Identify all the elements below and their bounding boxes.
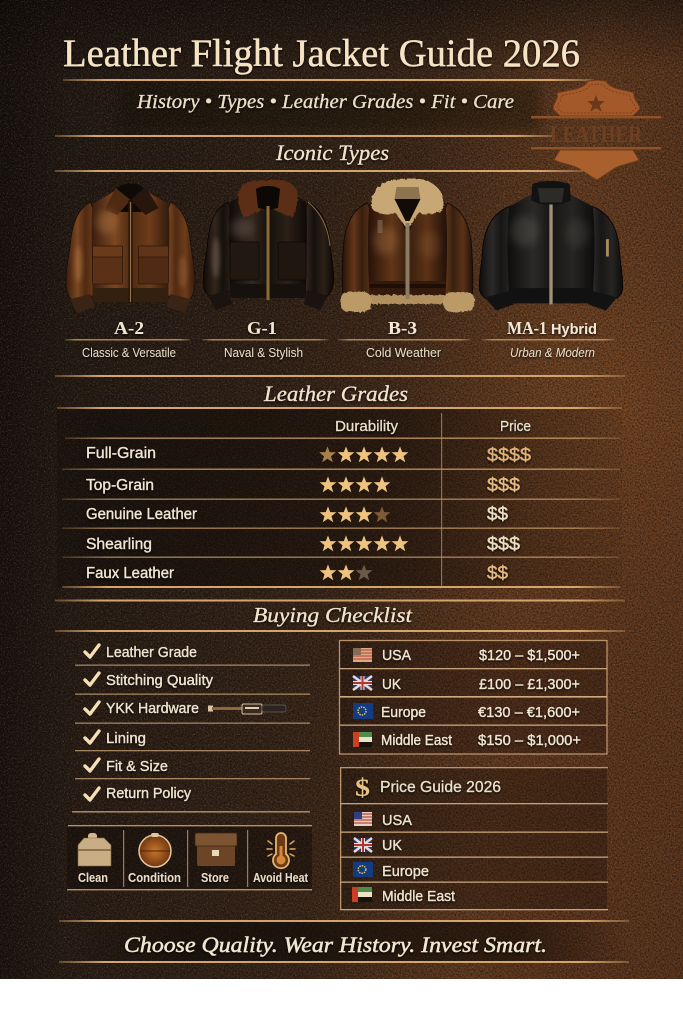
checklist items: Fit & Size [106,758,168,775]
jacket: A-2 [66,184,195,313]
flag: Europe [353,862,373,877]
price rows: UK [382,676,401,693]
price symbols: $$ [487,563,508,583]
jacket labels: Naval & Stylish [224,346,303,360]
icon: avoid heat [267,833,295,868]
panel: price guide 2026 [340,767,608,910]
price rows: £100 – £1,300+ [479,676,580,693]
jacket labels: Hybrid [551,321,597,338]
jacket labels: Urban & Modern [510,346,595,360]
jacket: MA-1 Hybrid [479,181,623,311]
row names [86,445,197,582]
price rows: $120 – $1,500+ [479,647,580,664]
row names: Shearling [86,536,152,553]
icon: dollar: $ [355,775,370,802]
checklist items [106,644,213,802]
heading: iconic types: Iconic Types [275,140,389,165]
subtitle: History • Types • Leather Grades • Fit • Care [136,91,514,113]
jacket labels: A-2 [114,318,144,338]
jacket labels: Classic & Versatile [82,346,176,360]
jacket: G-1 [203,180,334,310]
flag: UK [353,676,372,690]
price rows: USA [382,647,411,664]
icon: condition [139,833,171,867]
price rows: $150 – $1,000+ [478,732,581,749]
flag: USA [354,812,372,826]
price guide rows: USA [382,812,412,829]
row names: Genuine Leather [86,506,197,523]
care labels: Avoid Heat [253,871,309,885]
icon: zipper [208,704,286,714]
checklist items: Leather Grade [106,644,197,661]
price symbols: $$ [487,504,508,524]
leather badge [531,80,661,180]
care labels: Store [201,871,229,885]
flag: UK [354,838,372,852]
jacket labels: B-3 [388,318,417,338]
price symbols [487,445,531,583]
price guide rows: Middle East [382,888,456,905]
row names: Faux Leather [86,565,174,582]
row names: Top-Grain [86,477,154,494]
care labels [78,871,309,885]
checklist [72,644,310,813]
flag: Middle East [353,732,372,747]
price rows: Middle East [381,732,453,749]
check marks [85,645,99,800]
jacket: B-3 [340,178,474,312]
icon: store [195,833,237,866]
jacket labels [82,318,597,360]
table header: Durability [335,419,399,435]
footer tagline: Choose Quality. Wear History. Invest Smart. [124,932,547,957]
price symbols: $$$ [487,475,520,495]
table header: Price [500,419,531,435]
panel: regional prices [340,640,607,754]
checklist items: Stitching Quality [106,672,213,689]
price rows [381,647,581,749]
price guide heading: Price Guide 2026 [380,779,501,796]
price rows: €130 – €1,600+ [478,704,580,721]
care labels: Clean [78,871,108,885]
jacket labels: Cold Weather [366,346,441,360]
price symbols: $$$ [487,534,520,554]
leather badge: LEATHER [550,122,642,147]
heading: leather grades: Leather Grades [263,381,408,406]
table: leather grades [55,413,625,602]
price guide rows: UK [382,837,402,854]
flag: Middle East [352,887,372,902]
heading: buying checklist: Buying Checklist [253,603,413,627]
table header [335,419,531,435]
durability stars [319,446,408,580]
price guide rows [382,812,456,905]
jacket labels: G-1 [247,318,277,338]
jacket labels: MA-1 [507,318,547,338]
row names: Full-Grain [86,445,156,462]
checklist items: YKK Hardware [106,700,199,717]
title: Leather Flight Jacket Guide 2026 [63,32,580,75]
price rows: Europe [381,704,426,721]
panel: care icons [67,825,312,890]
care labels: Condition [128,871,181,885]
checklist items: Lining [106,730,146,747]
price symbols: $$$$ [487,445,531,465]
price guide rows: Europe [382,863,429,880]
checklist items: Return Policy [106,785,191,802]
icon: clean [78,833,111,866]
flag: USA [353,648,372,662]
flag: Europe [353,703,373,719]
